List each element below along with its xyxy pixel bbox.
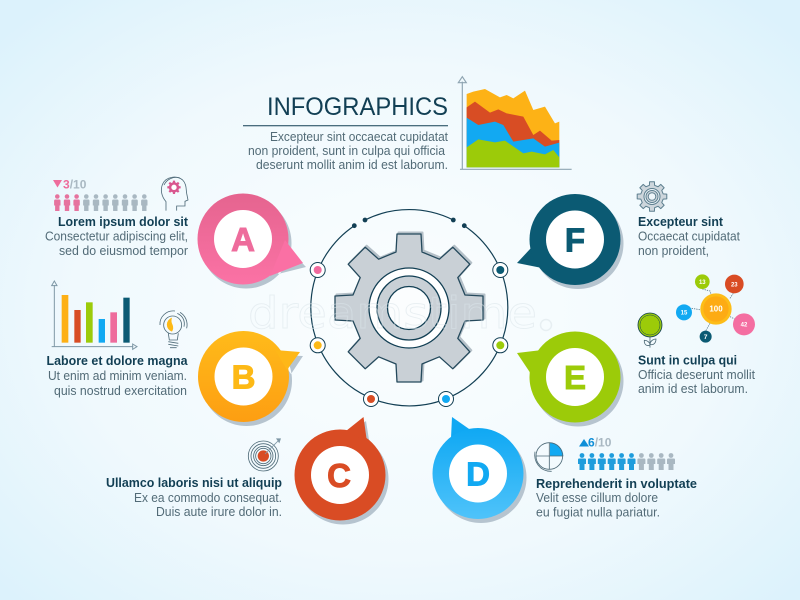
bubble network chart bbox=[676, 274, 755, 343]
central gear ring bbox=[311, 210, 508, 406]
bubble network chart: 23 bbox=[731, 282, 738, 288]
text B: Labore et dolore magna bbox=[46, 353, 188, 368]
stat 3/10: 3/10 bbox=[63, 178, 87, 192]
text E: Sunt in culpa qui bbox=[638, 352, 737, 368]
bubble D: D bbox=[466, 456, 490, 492]
text E bbox=[638, 352, 756, 396]
bubble B: B bbox=[232, 358, 255, 396]
bubble network chart: 100 bbox=[709, 305, 723, 314]
intro text: Excepteur sint occaecat cupidatat bbox=[270, 130, 448, 144]
area chart bbox=[458, 77, 572, 169]
text D: Velit esse cillum dolore bbox=[536, 491, 658, 505]
bubble network chart: 15 bbox=[681, 311, 688, 317]
bubble C bbox=[294, 417, 389, 525]
bubble network chart: 42 bbox=[741, 323, 748, 329]
icon: flower bbox=[638, 313, 662, 348]
text F bbox=[638, 214, 740, 258]
stat 3/10 bbox=[53, 178, 87, 192]
bubble network chart: 7 bbox=[704, 334, 708, 341]
people pictogram A bbox=[54, 194, 148, 211]
text A: Consectetur adipiscing elit, bbox=[45, 230, 188, 244]
icon: target bbox=[248, 438, 281, 471]
bar chart bbox=[52, 281, 137, 349]
bubble A bbox=[198, 194, 306, 288]
text D bbox=[536, 476, 697, 520]
panel: C bbox=[106, 417, 389, 525]
icon: head with gear bbox=[161, 177, 188, 211]
bubble E bbox=[517, 332, 624, 427]
text B bbox=[46, 353, 188, 398]
text A: sed do eiusmod tempor bbox=[59, 244, 188, 258]
text C: Ullamco laboris nisi ut aliquip bbox=[106, 475, 282, 490]
gear bbox=[335, 232, 484, 382]
bubble D bbox=[432, 417, 527, 523]
panel: B bbox=[46, 281, 303, 426]
stat 6/10: 6/10 bbox=[588, 436, 612, 450]
text C: Ex ea commodo consequat. bbox=[134, 491, 282, 505]
text F: non proident, bbox=[638, 244, 709, 258]
text D: Reprehenderit in voluptate bbox=[536, 476, 697, 491]
intro text bbox=[248, 130, 448, 172]
bubble network chart: 13 bbox=[699, 280, 706, 286]
bubble F: F bbox=[565, 222, 585, 258]
bubble C: C bbox=[327, 457, 351, 494]
text E: anim id est laborum. bbox=[638, 382, 748, 396]
ring nodes bbox=[310, 262, 508, 406]
panel: F bbox=[517, 182, 740, 289]
bubble E: E bbox=[564, 359, 586, 396]
panel: A bbox=[45, 177, 306, 288]
intro text: deserunt mollit anim id est laborum. bbox=[256, 158, 448, 172]
icon: pie bbox=[535, 443, 563, 471]
text D: eu fugiat nulla pariatur. bbox=[536, 506, 660, 520]
text F: Occaecat cupidatat bbox=[638, 230, 740, 244]
text A bbox=[45, 214, 189, 258]
text E: Officia deserunt mollit bbox=[638, 368, 756, 382]
watermark: dreamstime bbox=[248, 288, 537, 339]
text A: Lorem ipsum dolor sit bbox=[58, 214, 189, 229]
icon: small gear bbox=[637, 182, 667, 211]
bubble B bbox=[198, 331, 303, 426]
people pictogram D bbox=[578, 453, 675, 470]
text F: Excepteur sint bbox=[638, 214, 724, 229]
intro text: non proident, sunt in culpa qui officia bbox=[248, 144, 445, 158]
text B: Ut enim ad minim veniam. bbox=[48, 369, 187, 383]
text C: Duis aute irure dolor in. bbox=[156, 505, 282, 519]
icon: light bulb bbox=[160, 311, 187, 348]
panel: E bbox=[517, 274, 756, 427]
bubble A: A bbox=[231, 221, 255, 258]
title: INFOGRAPHICS bbox=[267, 93, 448, 121]
bubble F bbox=[517, 194, 624, 289]
panel: D bbox=[432, 417, 697, 523]
text C bbox=[106, 475, 282, 519]
text B: quis nostrud exercitation bbox=[54, 384, 187, 398]
